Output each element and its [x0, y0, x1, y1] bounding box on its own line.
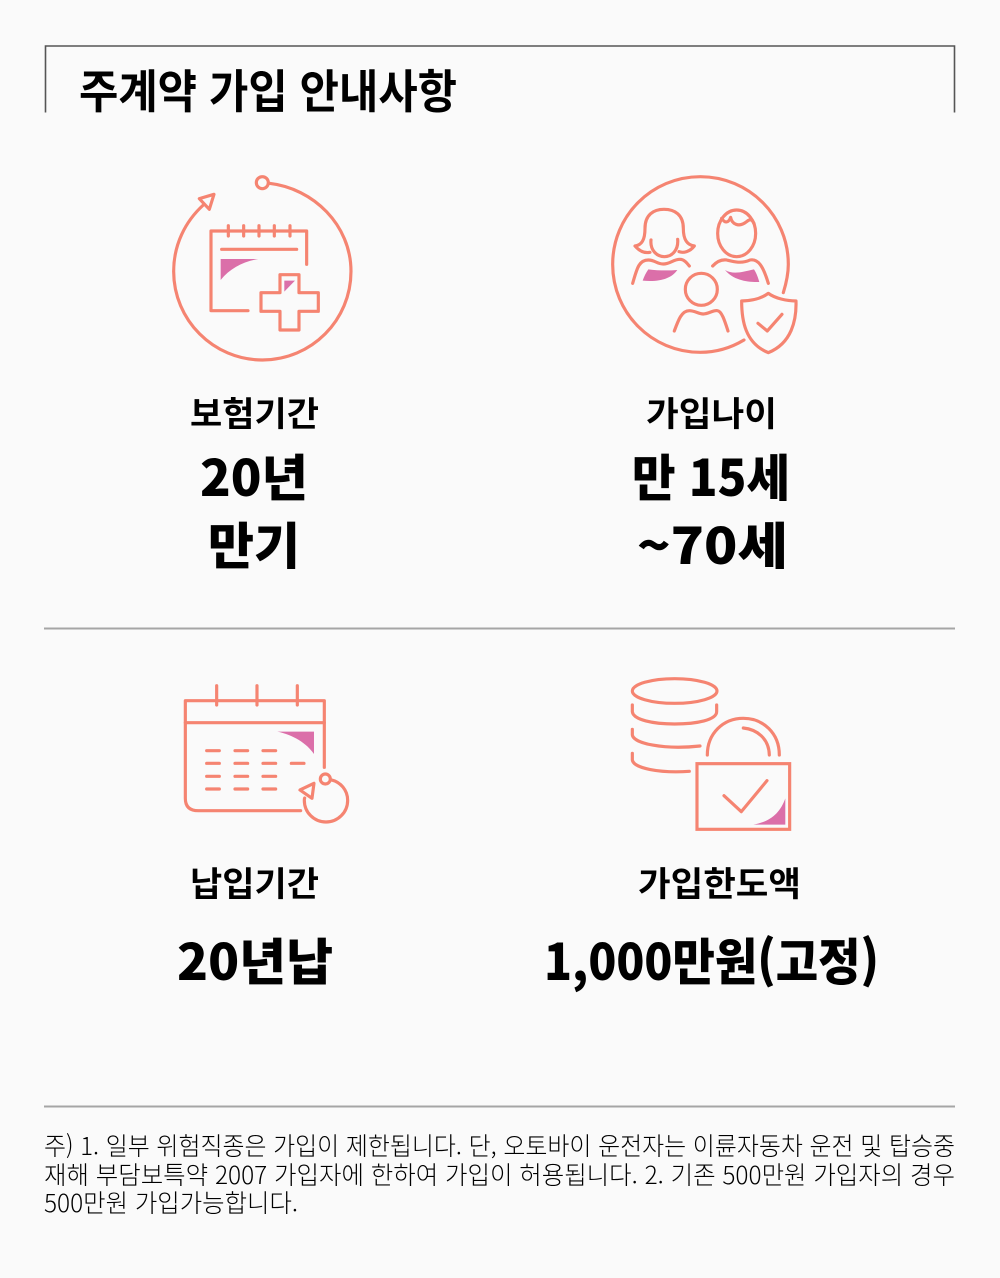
footnote	[44, 1127, 955, 1220]
footnote: 500만원 가입가능합니다.	[44, 1184, 298, 1220]
label: insurance period: 보험기간	[190, 387, 319, 436]
label: coverage limit: 가입한도액	[638, 857, 801, 906]
icon: coins and lock	[632, 679, 790, 829]
icon: family with shield	[613, 177, 796, 353]
title: 주계약 가입 안내사항	[79, 56, 457, 122]
label: age: 가입나이	[646, 387, 777, 436]
icon: calendar with cycle arrow	[185, 686, 348, 822]
label: payment period: 납입기간	[190, 857, 319, 906]
value: 20 year term: 20년	[200, 439, 308, 511]
value: age from 15: 만 15세	[632, 439, 790, 511]
value: maturity: 만기	[208, 507, 300, 579]
footnote: 주) 1. 일부 위험직종은 가입이 제한됩니다. 단, 오토바이 운전자는 이륜자동차 운전 및 탑승중	[44, 1127, 955, 1163]
value: age to 70: ~70세	[637, 507, 788, 579]
value: 10 million won fixed: 1,000만원(고정)	[544, 923, 879, 995]
icon: calendar with medical cross	[174, 177, 351, 360]
footnote: 재해 부담보특약 2007 가입자에 한하여 가입이 허용됩니다. 2. 기존 500만원 가입자의 경우	[44, 1156, 955, 1192]
value: 20 year payment: 20년납	[177, 923, 333, 995]
